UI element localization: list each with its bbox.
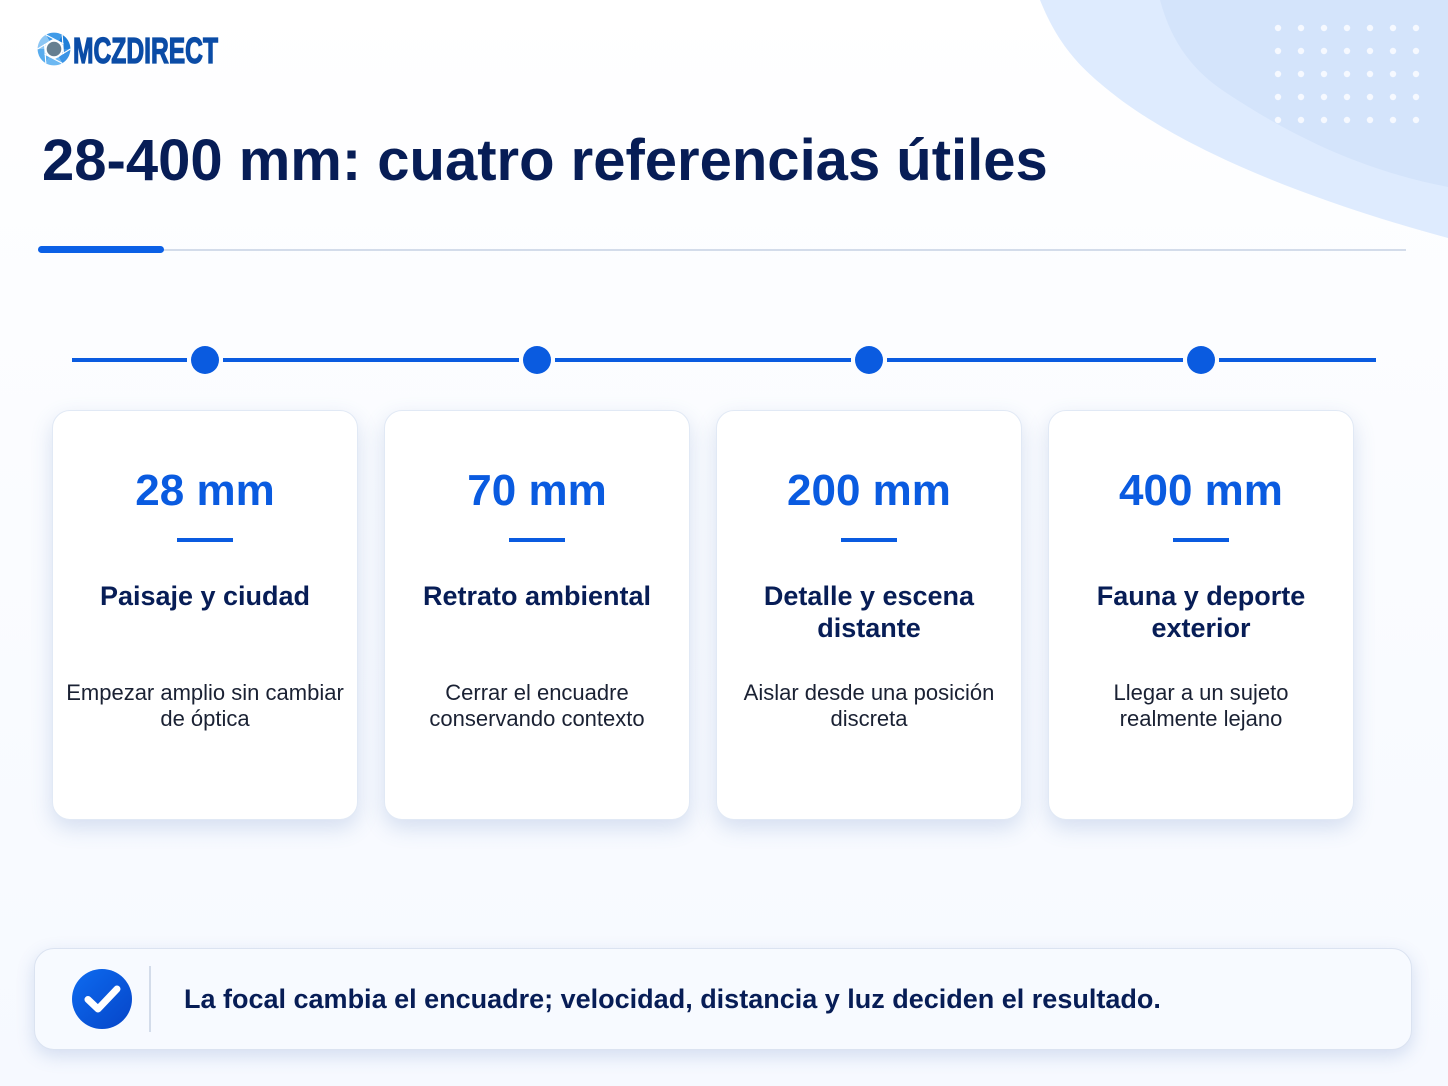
icon: camera aperture — [38, 33, 70, 65]
card: 28 mm — [52, 410, 358, 820]
card: 70 mm — [384, 410, 690, 820]
icon: check — [72, 969, 132, 1029]
card: 400 mm: 400 mm — [1119, 466, 1283, 515]
card: 200 mm: 200 mm — [787, 466, 951, 515]
title: 28-400 mm: cuatro referencias útiles — [42, 128, 1048, 193]
card: 200 mm: Detalle y escena — [764, 581, 974, 611]
card: 400 mm: realmente lejano — [1120, 706, 1282, 731]
card: 70 mm: Cerrar el encuadre — [445, 680, 629, 705]
callout text: La focal cambia el encuadre; velocidad, distancia y luz deciden el resultado. — [184, 984, 1161, 1014]
timeline — [72, 346, 1376, 374]
card: 200 mm: discreta — [830, 706, 908, 731]
card: 400 mm: Llegar a un sujeto — [1114, 680, 1288, 705]
card: 28 mm: de óptica — [160, 706, 250, 731]
title divider with accent — [38, 246, 1406, 253]
card: 70 mm: Retrato ambiental — [423, 581, 651, 611]
card: 200 mm: distante — [817, 613, 921, 643]
card: 200 mm: Aislar desde una posición — [744, 680, 994, 705]
card: 200 mm — [716, 410, 1022, 820]
card: 400 mm — [1048, 410, 1354, 820]
decorative background shapes — [1040, 0, 1448, 238]
card: 28 mm: 28 mm — [135, 466, 275, 515]
card: 400 mm: exterior — [1151, 613, 1251, 643]
card: 28 mm: Empezar amplio sin cambiar — [66, 680, 344, 705]
card: 70 mm: 70 mm — [467, 466, 607, 515]
callout — [34, 948, 1412, 1050]
card: 70 mm: conservando contexto — [429, 706, 645, 731]
card: 400 mm: Fauna y deporte — [1097, 581, 1305, 611]
card: 28 mm: Paisaje y ciudad — [100, 581, 310, 611]
